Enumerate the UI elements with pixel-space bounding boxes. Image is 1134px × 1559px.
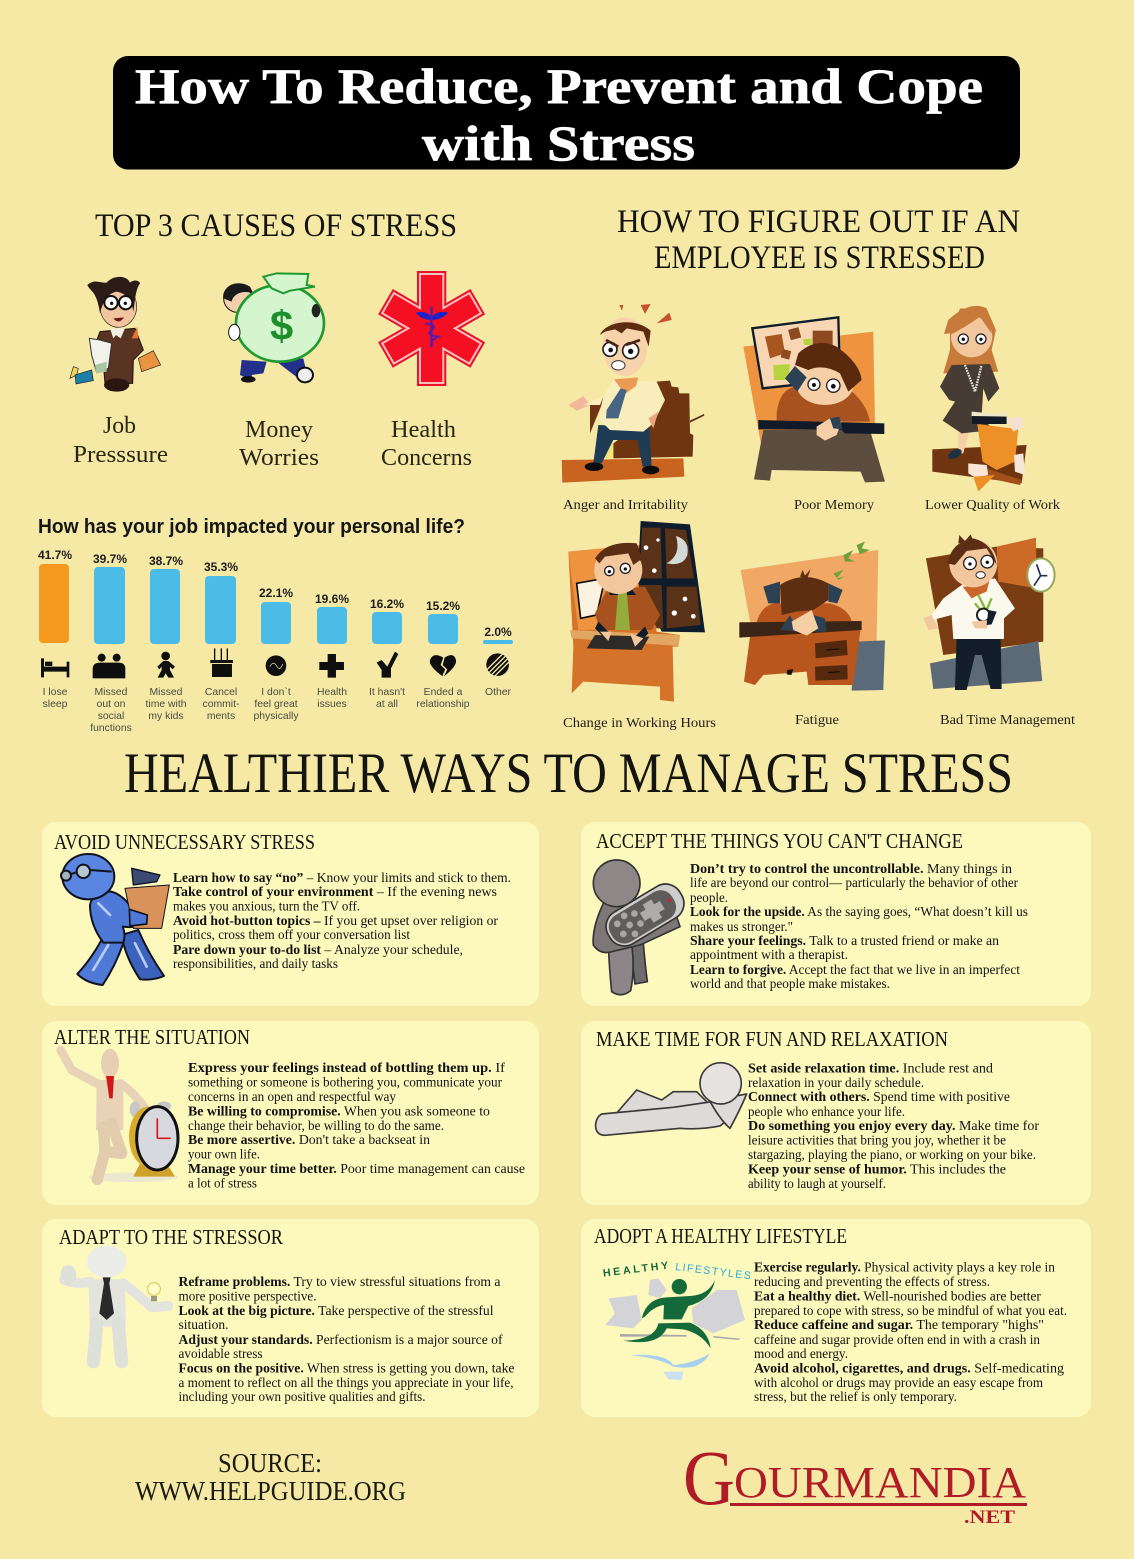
panel text: Connect with others. Spend time with positive (748, 1089, 1010, 1104)
panel text: stress, but the relief is only temporary. (754, 1389, 957, 1404)
caption: change in working hours: Change in Working Hours (563, 716, 716, 731)
bar labels: It hasn't (369, 687, 405, 698)
panel text: Manage your time better. Poor time management can cause (188, 1161, 525, 1176)
panel text: Reduce caffeine and sugar. The temporary "highs" (754, 1317, 1044, 1332)
icon: white figure holding light bulb (60, 1246, 168, 1362)
panel text: Be more assertive. Don't take a backseat in (188, 1132, 430, 1147)
panel text: mood and energy. (754, 1346, 848, 1361)
illustration: change in working hours (568, 521, 705, 702)
bar labels: Ended a (424, 687, 463, 698)
panel text: Learn to forgive. Accept the fact that we live in an imperfect (690, 962, 1020, 977)
icon: medical star of life (378, 271, 485, 386)
panel text: your own life. (188, 1146, 260, 1162)
panel text: prepared to cope with stress, so be mindful of what you eat. (754, 1303, 1067, 1318)
panel text: makes us stronger." (690, 919, 793, 934)
icon: healthy lifestyles runner logo: LIFESTYLES (675, 1261, 752, 1282)
panel text: change their behavior, be willing to do the same. (188, 1118, 444, 1133)
panel text: a moment to reflect on all the things you appreciate in your life, (178, 1375, 514, 1390)
heading: how to figure out if an employee is stressed: HOW TO FIGURE OUT IF AN (617, 204, 1020, 240)
illustration: bad time management (923, 534, 1055, 690)
caption: poor memory: Poor Memory (794, 498, 874, 513)
bar labels: out on (97, 699, 126, 710)
panel heading: ADOPT A HEALTHY LIFESTYLE (594, 1224, 847, 1248)
bar labels: social (98, 711, 124, 722)
panel: avoid unnecessary stress (42, 822, 539, 1006)
panel text: appointment with a therapist. (690, 947, 848, 962)
bar labels: Missed (150, 687, 183, 698)
heading: top 3 causes: TOP 3 CAUSES OF STRESS (95, 208, 457, 244)
icon: healthy lifestyles runner logo (602, 1260, 752, 1380)
panel text: caffeine and sugar provide often end in with a crash in (754, 1332, 1040, 1347)
heading: how to figure out if an employee is stressed: EMPLOYEE IS STRESSED (654, 240, 985, 276)
panel text: relaxation in your daily schedule. (748, 1075, 924, 1090)
bar labels: Missed (95, 687, 128, 698)
label: job pressure: Job (103, 413, 136, 439)
icon: money bag man (223, 273, 324, 383)
panel text: Look for the upside. As the saying goes, “What doesn’t kill us (690, 904, 1028, 919)
panel: accept the things you can't change (581, 822, 1091, 1006)
panel text (188, 1060, 525, 1190)
panel text: people who enhance your life. (748, 1104, 905, 1119)
bar labels: feel great (254, 699, 298, 710)
panel text: Exercise regularly. Physical activity plays a key role in (754, 1260, 1055, 1274)
logo: gourmandia.net (683, 1434, 1027, 1528)
panel text: leisure activities that bring you joy, whether it be (748, 1132, 1006, 1148)
panel text: makes you anxious, turn the TV off. (173, 898, 360, 914)
bar values (38, 548, 512, 639)
panel text: with alcohol or drugs may provide an easy escape from (754, 1375, 1043, 1390)
bar labels: sleep (43, 699, 68, 710)
bar icons (41, 648, 510, 678)
icon: healthy lifestyles runner logo: HEALTHY (602, 1260, 669, 1280)
panel text (690, 861, 1028, 991)
bar values: 22.1% (259, 586, 293, 600)
panel text: Do something you enjoy every day. Make time for (748, 1118, 1039, 1133)
panel text: including your own positive qualities and gifts. (178, 1389, 426, 1404)
icon: grey figure with remote control (593, 860, 690, 995)
panel text: concerns in an open and respectful way (188, 1089, 396, 1104)
caption: anger and irritability: Anger and Irritability (563, 498, 688, 513)
chart title: How has your job impacted your personal life? (38, 516, 465, 538)
logo: gourmandia.net: G (683, 1434, 735, 1521)
panel heading: ACCEPT THE THINGS YOU CAN'T CHANGE (596, 829, 963, 853)
panel text: Eat a healthy diet. Well-nourished bodies are better (754, 1288, 1041, 1304)
bars (39, 564, 513, 644)
label: money worries: Worries (239, 445, 319, 471)
panel text (178, 1274, 514, 1404)
panel text: Focus on the positive. When stress is getting you down, take (178, 1360, 514, 1376)
panel: adapt to the stressor (42, 1219, 539, 1417)
panel text: Take control of your environment – If the evening news (173, 884, 497, 899)
bar labels: commit- (203, 699, 239, 710)
panel text: Adjust your standards. Perfectionism is a major source of (178, 1332, 503, 1347)
bar values: 15.2% (426, 599, 460, 613)
label: money worries: Money (245, 417, 313, 443)
icon: figure leaning on alarm clock (61, 1049, 178, 1182)
panel text (173, 870, 511, 971)
bar labels: physically (253, 711, 299, 722)
panel text: politics, cross them off your conversation list (173, 927, 410, 942)
panel text: avoidable stress (178, 1346, 262, 1361)
caption: lower quality of work: Lower Quality of Work (925, 498, 1060, 513)
bar values: 2.0% (484, 625, 512, 639)
source credit (135, 1448, 406, 1506)
label: health concerns: Concerns (381, 445, 472, 471)
panel text: Keep your sense of humor. This includes the (748, 1162, 1006, 1176)
bar chart: how has your job impacted your personal life (38, 516, 513, 734)
panel text: more positive perspective. (178, 1288, 316, 1304)
panel text: a lot of stress (188, 1176, 257, 1190)
bar labels: Health (317, 687, 347, 698)
bar labels: Cancel (205, 687, 237, 698)
panel text: people. (690, 890, 728, 905)
panel: adopt a healthy lifestyle (581, 1219, 1091, 1417)
panel heading: AVOID UNNECESSARY STRESS (54, 830, 315, 854)
illustration: poor memory (743, 317, 885, 482)
bar labels: functions (90, 723, 132, 734)
panel text: Don’t try to control the uncontrollable. Many things in (690, 861, 1012, 876)
logo: gourmandia.net: OURMANDIA (734, 1458, 1026, 1507)
panel text: Express your feelings instead of bottling them up. If (188, 1060, 505, 1075)
icon: job pressure woman (70, 277, 161, 392)
bar labels: relationship (416, 699, 470, 710)
bar values: 39.7% (93, 552, 127, 566)
panel text: Avoid alcohol, cigarettes, and drugs. Self-medicating (754, 1360, 1064, 1376)
bar values: 16.2% (370, 597, 404, 611)
caption: bad time management: Bad Time Management (940, 713, 1075, 728)
panel text (754, 1260, 1067, 1404)
panel text: Avoid hot-button topics – If you get upset over religion or (173, 913, 498, 928)
panel heading: ADAPT TO THE STRESSOR (59, 1225, 284, 1249)
panel text: stargazing, playing the piano, or working on your bike. (748, 1147, 1036, 1162)
bar labels: at all (376, 699, 398, 710)
icon: money bag man: $ (270, 302, 293, 349)
panel text: Be willing to compromise. When you ask someone to (188, 1104, 490, 1118)
panel text: Look at the big picture. Take perspective of the stressful (178, 1303, 494, 1318)
icon: reclining figure (596, 1063, 747, 1135)
title banner (113, 56, 1020, 171)
panel text: Learn how to say “no” – Know your limits and stick to them. (173, 870, 511, 885)
panel text: Share your feelings. Talk to a trusted friend or make an (690, 933, 999, 948)
caption: fatigue: Fatigue (795, 713, 839, 728)
bar values: 19.6% (315, 592, 349, 606)
label: money worries (239, 417, 319, 471)
panel text: responsibilities, and daily tasks (173, 956, 338, 971)
label: job pressure: Presssure (73, 442, 168, 468)
bar labels: issues (317, 699, 347, 710)
panel: make time for fun and relaxation (581, 1021, 1091, 1205)
title banner: with Stress (422, 115, 695, 171)
panel heading: MAKE TIME FOR FUN AND RELAXATION (596, 1027, 948, 1051)
panel text: life are beyond our control— particularly the behavior of other (690, 875, 1018, 890)
bar labels: time with (146, 699, 187, 710)
panel text: ability to laugh at yourself. (748, 1176, 886, 1191)
panel text: Set aside relaxation time. Include rest and (748, 1060, 993, 1076)
bar labels: ments (207, 711, 235, 722)
logo: gourmandia.net: .NET (964, 1507, 1015, 1528)
label: job pressure (73, 413, 168, 468)
source credit: SOURCE: (218, 1448, 322, 1478)
panel heading: ALTER THE SITUATION (54, 1025, 250, 1049)
icon: blue figure with clipboard (61, 854, 169, 985)
bar labels: I don`t (261, 686, 291, 698)
panel text (748, 1060, 1039, 1191)
bar values: 35.3% (204, 560, 238, 574)
bar labels: I lose (43, 687, 68, 698)
bar labels: Other (485, 687, 512, 698)
bar values: 38.7% (149, 554, 183, 568)
illustration: lower quality of work (932, 306, 1027, 492)
source credit: WWW.HELPGUIDE.ORG (135, 1476, 406, 1506)
bar labels: my kids (148, 711, 184, 722)
panel text: something or someone is bothering you, communicate your (188, 1074, 502, 1090)
panel: alter the situation (42, 1021, 539, 1205)
panel text: world and that people make mistakes. (690, 976, 890, 991)
bar labels (43, 686, 512, 734)
bar values: 41.7% (38, 548, 72, 562)
panel text: Reframe problems. Try to view stressful situations from a (178, 1274, 500, 1289)
label: health concerns (381, 417, 472, 471)
panel text: reducing and preventing the effects of stress. (754, 1274, 990, 1289)
panel text: situation. (178, 1317, 228, 1332)
panel text: Pare down your to-do list – Analyze your schedule, (173, 942, 463, 957)
heading: how to figure out if an employee is stressed (617, 204, 1020, 276)
illustration: anger and irritability (562, 304, 704, 483)
title banner: How To Reduce, Prevent and Cope (135, 58, 983, 114)
illustration: fatigue (739, 542, 885, 691)
label: health concerns: Health (391, 417, 456, 443)
